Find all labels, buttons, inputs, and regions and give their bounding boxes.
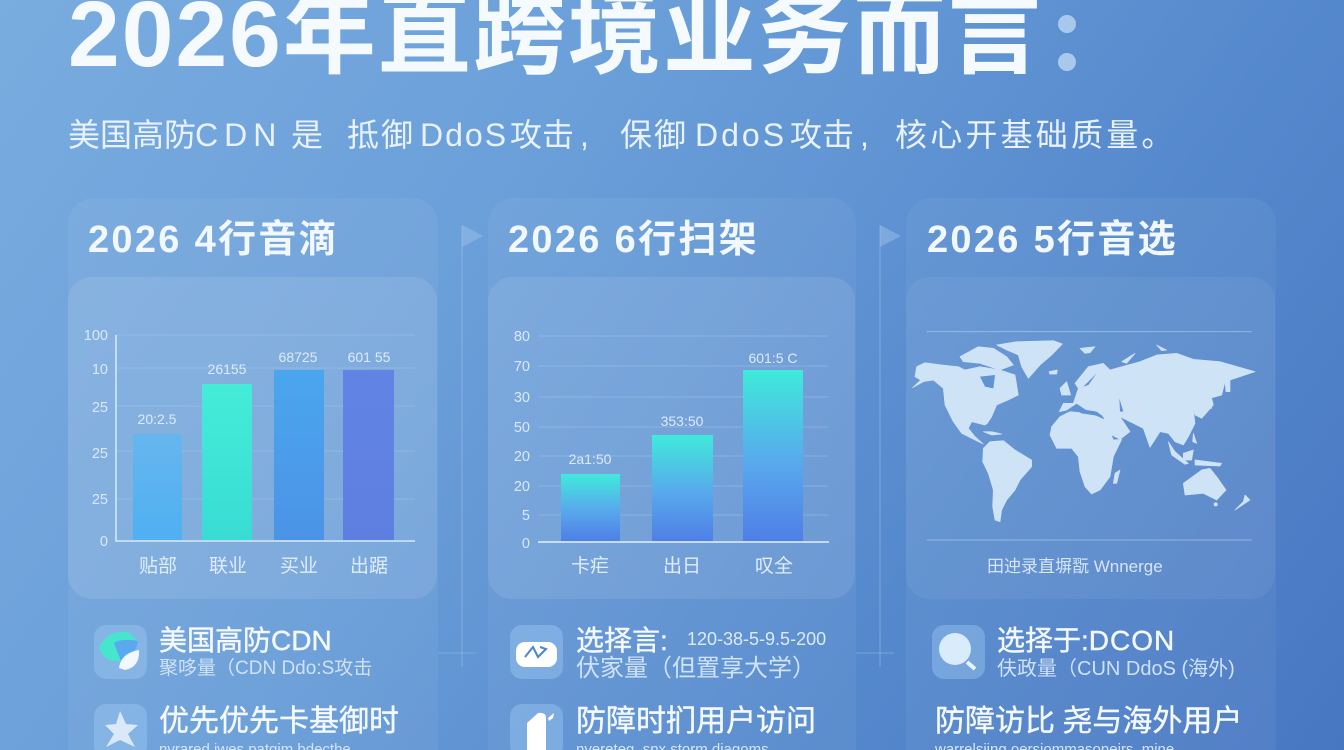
subtitle: 核心开基础质量。 <box>895 117 1177 153</box>
world map <box>912 331 1256 540</box>
subtitle: , <box>860 117 869 153</box>
title colon <box>1058 15 1076 71</box>
item title: 防障时扪用户访问 <box>576 705 816 738</box>
subtitle: 抵御 <box>347 117 415 153</box>
bar chart: left <box>84 328 415 577</box>
bar chart: left: 601 55 <box>348 349 391 365</box>
bar chart: middle: 30 <box>514 390 530 406</box>
bar chart: left: 0 <box>100 534 108 550</box>
card: right map <box>906 277 1275 599</box>
item title: 优先优先卡基御时 <box>159 705 399 738</box>
bar chart: middle: 卡疟 <box>571 555 609 577</box>
heading: middle: 2026 6行扫架 <box>508 219 759 261</box>
bar chart: left: 26155 <box>208 361 247 377</box>
heading: left: 2026 4行音滴 <box>88 219 339 261</box>
subtitle: 美国高防 <box>68 117 196 153</box>
item: left 2 <box>94 704 399 750</box>
item subtitle: 聚哆量（CDN Ddo:S攻击 <box>159 658 372 679</box>
bar chart: left: 20:2.5 <box>138 411 177 427</box>
subtitle: 攻击 <box>510 117 574 153</box>
item subtitle: 伏家量（但置享大学） <box>576 655 816 682</box>
bar chart: left: 68725 <box>279 349 318 365</box>
panel: left <box>68 198 438 750</box>
card: left chart <box>68 277 437 599</box>
icon: magnifier <box>932 625 985 679</box>
bar chart: left: 25 <box>92 492 108 508</box>
subtitle: 保御 <box>620 117 688 153</box>
subtitle: , <box>580 117 589 153</box>
heading: right: 2026 5行音选 <box>927 219 1178 261</box>
item title: 选择言: <box>576 625 668 656</box>
map caption: 田迚录直塀翫 Wnnerge <box>987 557 1163 576</box>
icon: shield <box>94 625 147 679</box>
item title: 美国高防CDN <box>159 625 332 656</box>
item title: 防障访比 尧与海外用户 <box>935 705 1242 738</box>
bar chart: left: 买业 <box>280 555 318 577</box>
bar chart: middle: 出日 <box>663 555 701 577</box>
bar chart: middle: 80 <box>514 329 530 345</box>
bar chart: left: 25 <box>92 400 108 416</box>
icon: document <box>510 704 563 750</box>
item: left 1 <box>94 625 372 679</box>
subtitle: CDN <box>195 117 282 153</box>
bar chart: middle: 2a1:50 <box>569 451 612 467</box>
bar chart: middle: 353:50 <box>661 413 704 429</box>
item: middle 2 <box>510 704 816 750</box>
subtitle: 攻击 <box>790 117 854 153</box>
bar chart: left: 贴部 <box>139 555 177 577</box>
card: middle chart <box>488 277 855 599</box>
panel: right <box>906 198 1276 750</box>
subtitle: 是 <box>291 117 323 153</box>
subtitle: DdoS <box>420 117 508 153</box>
bar chart: left: 100 <box>84 328 108 344</box>
bar chart: left: 联业 <box>209 555 247 577</box>
item: middle 1 <box>510 625 826 682</box>
panel: middle <box>488 198 856 750</box>
bar chart: middle: 20 <box>514 479 530 495</box>
item: right 2 <box>935 705 1242 750</box>
item title: 选择于:DCON <box>997 625 1175 656</box>
bar chart: left: 出踞 <box>350 555 388 577</box>
icon: tag <box>510 625 563 679</box>
bar chart: middle: 70 <box>514 359 530 375</box>
item: right 1 <box>932 625 1235 680</box>
subtitle: DdoS <box>695 117 787 153</box>
bar chart: left: 25 <box>92 446 108 462</box>
bar chart: middle <box>514 329 829 577</box>
bar chart: middle: 601:5 C <box>748 350 798 366</box>
subtitle <box>68 117 1177 153</box>
bar chart: middle: 50 <box>514 420 530 436</box>
item subtitle: 伕政量（CUN DdoS (海外) <box>997 658 1235 680</box>
bar chart: middle: 0 <box>522 536 530 552</box>
bar chart: middle: 20 <box>514 449 530 465</box>
bar chart: middle: 5 <box>522 508 530 524</box>
arrow: middle to right <box>856 225 900 667</box>
item range: 120-38-5-9.5-200 <box>687 629 826 649</box>
bar chart: left: 10 <box>92 362 108 378</box>
bar chart: middle: 叹全 <box>755 555 793 577</box>
arrow: left to middle <box>438 225 482 667</box>
icon: star <box>94 704 147 750</box>
